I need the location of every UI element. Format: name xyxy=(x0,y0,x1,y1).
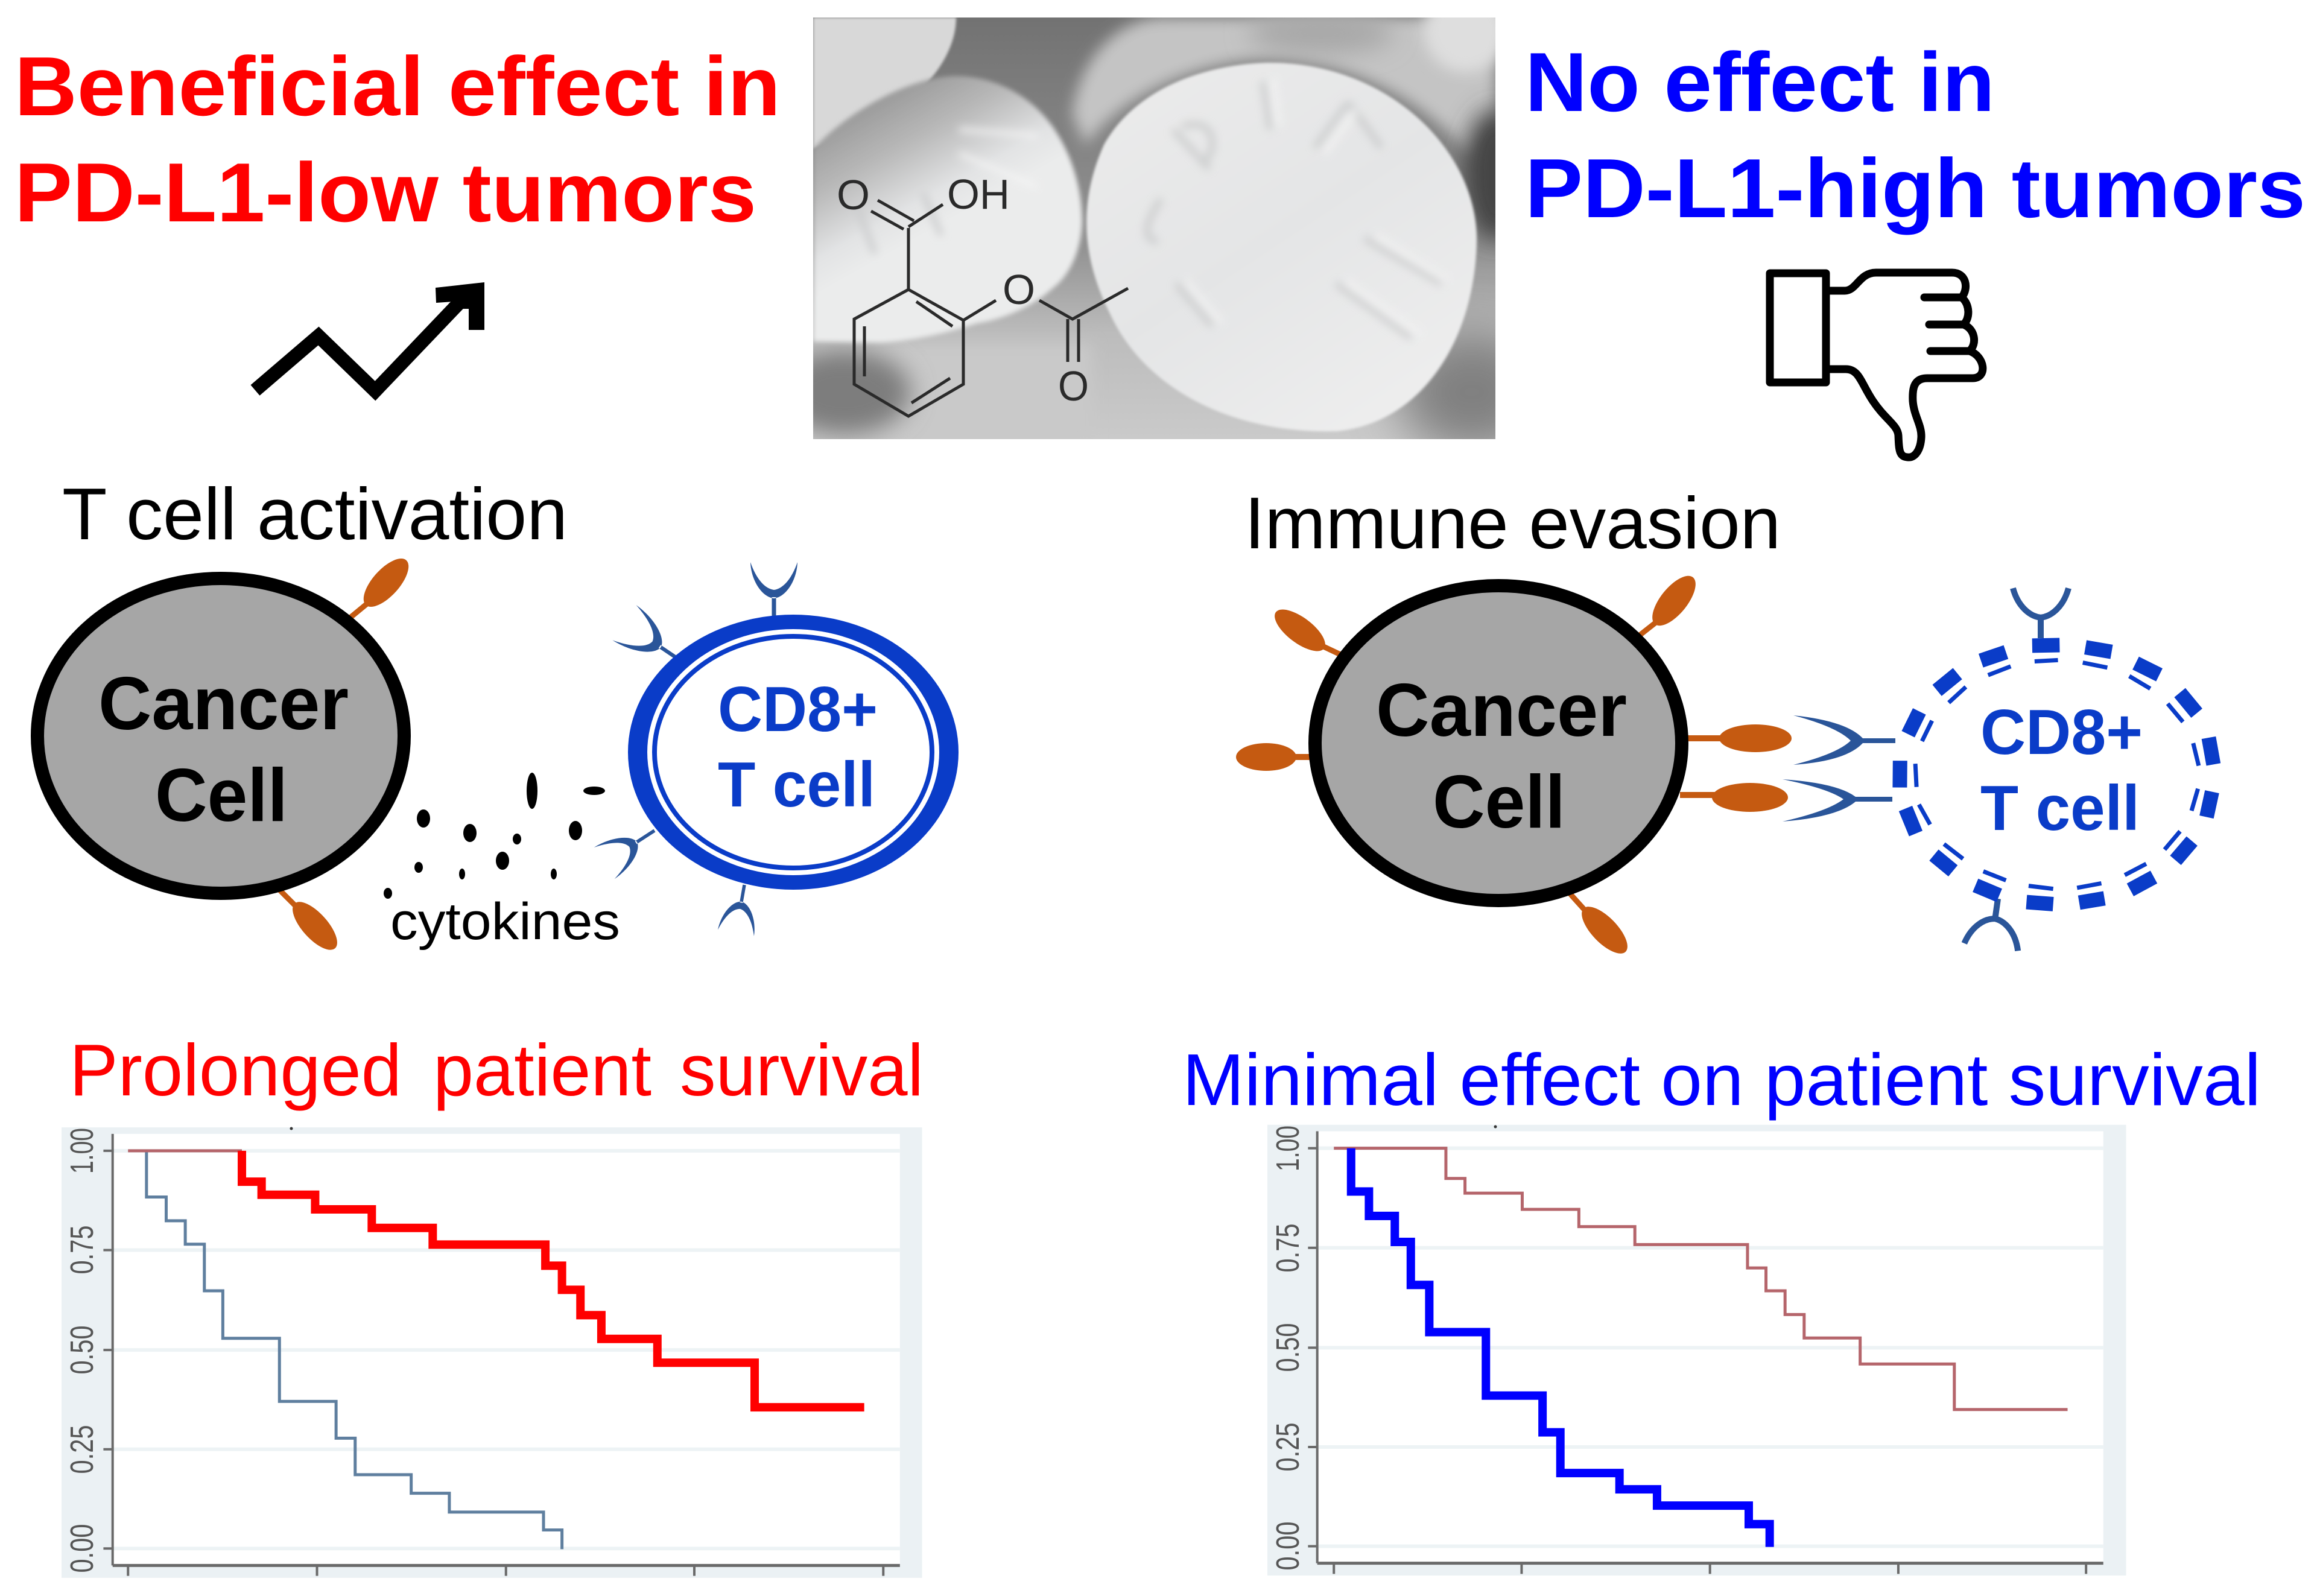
heading: prolonged patient survival: patient xyxy=(433,1029,651,1111)
icon: thumbs down xyxy=(1770,273,1983,457)
axis tick labels xyxy=(64,1128,100,1573)
heading: T cell activation: T cell activation xyxy=(62,473,568,555)
ligand: left xyxy=(1236,743,1314,771)
cancer cell: Cell xyxy=(1433,761,1565,844)
heading: prolonged patient survival xyxy=(69,1029,924,1111)
icon: zigzag up arrow xyxy=(255,282,484,391)
heading: beneficial effect in PD-L1-low tumors: Beneficial effect in xyxy=(14,40,781,133)
receptor: top xyxy=(750,562,797,618)
ligand: lower PD-L1 on cancer cell xyxy=(280,890,344,957)
CD8+ T cell, dashed exhausted membrane: T cell xyxy=(1980,773,2140,844)
cancer cell: Cancer xyxy=(1376,669,1627,752)
receptor: engaged lower xyxy=(1783,779,1892,822)
receptor: engaged upper xyxy=(1793,715,1895,765)
molecule: aspirin structure: O xyxy=(1003,266,1035,313)
label: cytokines: cytokines xyxy=(390,893,620,951)
axis tick labels xyxy=(1270,1126,1306,1571)
axis tick labels: 1.00 xyxy=(64,1128,100,1174)
molecule: aspirin structure xyxy=(837,171,1128,416)
CD8+ T cell, dashed exhausted membrane: CD8+ xyxy=(1980,697,2143,768)
axis tick labels: 0.75 xyxy=(64,1226,100,1274)
CD8+ T cell, activated with double membrane: CD8+ xyxy=(718,674,878,745)
panel: immune evasion diagram xyxy=(1236,569,2213,961)
curve: shared start brown segment xyxy=(128,1149,242,1152)
receptor: bottom xyxy=(1964,895,2024,951)
heading: prolonged patient survival: Prolonged xyxy=(69,1029,402,1111)
heading: no effect in PD-L1-high tumors xyxy=(1525,36,2306,235)
receptor: lower left xyxy=(594,815,665,879)
axis tick labels: 0.50 xyxy=(64,1326,100,1374)
ligand: top right xyxy=(1639,569,1704,636)
molecule: aspirin structure: OH xyxy=(947,171,1010,218)
photo: aspirin tablets with molecule xyxy=(813,17,1495,439)
curve: aspirin arm thick red xyxy=(242,1151,864,1407)
heading: beneficial effect in PD-L1-low tumors xyxy=(14,40,781,239)
ligand: upper PD-L1 on cancer cell xyxy=(349,551,416,619)
curve: aspirin arm thick blue xyxy=(1351,1148,1770,1547)
axis tick labels: 0.00 xyxy=(1270,1521,1306,1571)
axis tick labels: 0.50 xyxy=(1270,1323,1306,1372)
axis tick labels: 0.75 xyxy=(1270,1223,1306,1273)
receptor: upper left xyxy=(612,605,693,678)
receptor: bottom xyxy=(718,882,762,936)
heading: immune evasion: Immune evasion xyxy=(1244,482,1781,564)
cancer cell: Cell xyxy=(155,754,288,837)
axis tick labels: 0.25 xyxy=(1270,1422,1306,1472)
cancer cell: Cancer xyxy=(98,662,349,746)
axis tick labels: 0.00 xyxy=(64,1524,100,1573)
heading: no effect in PD-L1-high tumors: No effect in xyxy=(1525,36,1995,129)
CD8+ T cell, activated with double membrane: T cell xyxy=(718,749,875,820)
photo background: blurred aspirin tablets xyxy=(813,17,1495,439)
curve: control arm thin blue-gray xyxy=(147,1151,562,1549)
axis tick labels: 1.00 xyxy=(1270,1126,1306,1171)
receptor: top xyxy=(2013,588,2068,638)
heading: beneficial effect in PD-L1-low tumors: PD-L1-low tumors xyxy=(14,146,756,239)
curve: reference arm thin brown xyxy=(1334,1148,2068,1410)
axis tick labels: 0.25 xyxy=(64,1425,100,1474)
ligand: right upper engaging receptor xyxy=(1686,724,1792,752)
chart: survival curves, PD-L1-low xyxy=(62,1127,922,1578)
heading: minimal effect on patient survival: Minimal effect on patient survival xyxy=(1182,1039,2261,1121)
molecule: aspirin structure: O xyxy=(837,171,870,218)
heading: no effect in PD-L1-high tumors: PD-L1-high tumors xyxy=(1525,142,2306,235)
ligand: top left xyxy=(1268,602,1343,659)
CD8+ T cell, dashed exhausted membrane xyxy=(1900,645,2213,904)
CD8+ T cell, activated with double membrane xyxy=(628,615,959,890)
cancer cell xyxy=(1315,586,1682,901)
chart: survival curves, PD-L1-high xyxy=(1267,1125,2126,1575)
panel: T cell activation diagram xyxy=(37,551,959,957)
molecule: aspirin structure: O xyxy=(1058,363,1089,410)
chart frame and gridlines xyxy=(62,1127,922,1578)
cytokine particles xyxy=(384,773,605,899)
cancer cell xyxy=(37,578,404,893)
heading: prolonged patient survival: survival xyxy=(680,1029,924,1111)
membrane dashes xyxy=(1900,645,2213,904)
ligand: right lower engaging receptor xyxy=(1680,783,1788,812)
chart frame and gridlines xyxy=(1267,1125,2126,1575)
ligand: bottom xyxy=(1570,894,1635,961)
